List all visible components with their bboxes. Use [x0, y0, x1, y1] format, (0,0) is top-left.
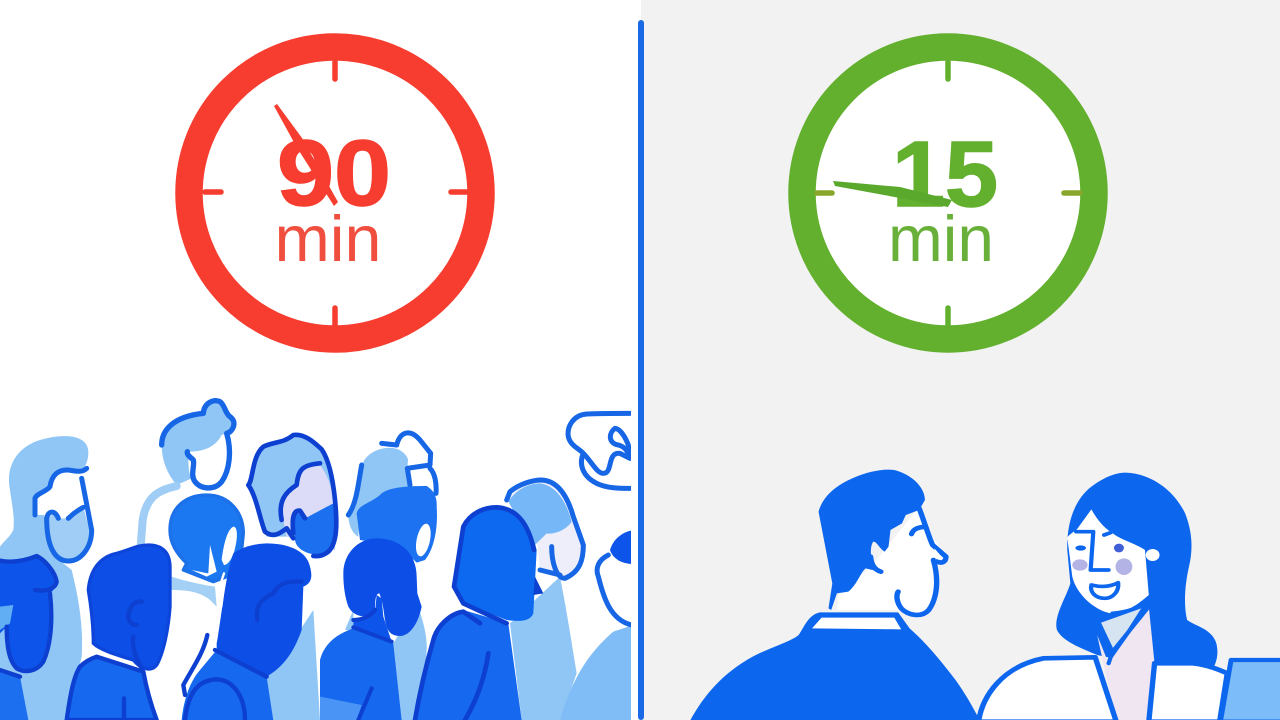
icon: green clock 15 min — [802, 47, 1094, 339]
person: front with long hair — [415, 507, 543, 720]
clock hand: green — [833, 181, 952, 207]
person: patient — [690, 470, 980, 720]
person: back far right with glasses — [507, 480, 583, 720]
person: back right, behind group — [348, 433, 437, 563]
icon: red clock 90 min — [189, 47, 481, 339]
panel: right grey background — [641, 0, 1280, 720]
person: back centre — [141, 401, 234, 607]
person: back left — [0, 436, 92, 720]
clock hand: red — [274, 104, 338, 206]
unit: min: min — [274, 202, 382, 275]
person: doctor — [979, 473, 1227, 720]
person: front centre-left — [67, 545, 170, 720]
icon: laptop — [1220, 660, 1280, 720]
person: top right outline — [568, 413, 630, 488]
number: 15: 15 — [892, 122, 998, 226]
number: 90: 90 — [277, 121, 391, 225]
person: far right partial head and shoulder — [560, 530, 633, 720]
unit: min: min — [888, 202, 994, 275]
person: front centre-right — [182, 543, 320, 720]
person: back with wavy hair — [248, 435, 336, 556]
vertical divider — [638, 20, 644, 720]
person: front left — [0, 556, 57, 720]
person: mid-blue centre head — [170, 495, 243, 582]
person: front with short hair — [320, 538, 427, 720]
illustration: doctor and patient — [690, 470, 1280, 720]
illustration: waiting crowd — [0, 401, 633, 720]
